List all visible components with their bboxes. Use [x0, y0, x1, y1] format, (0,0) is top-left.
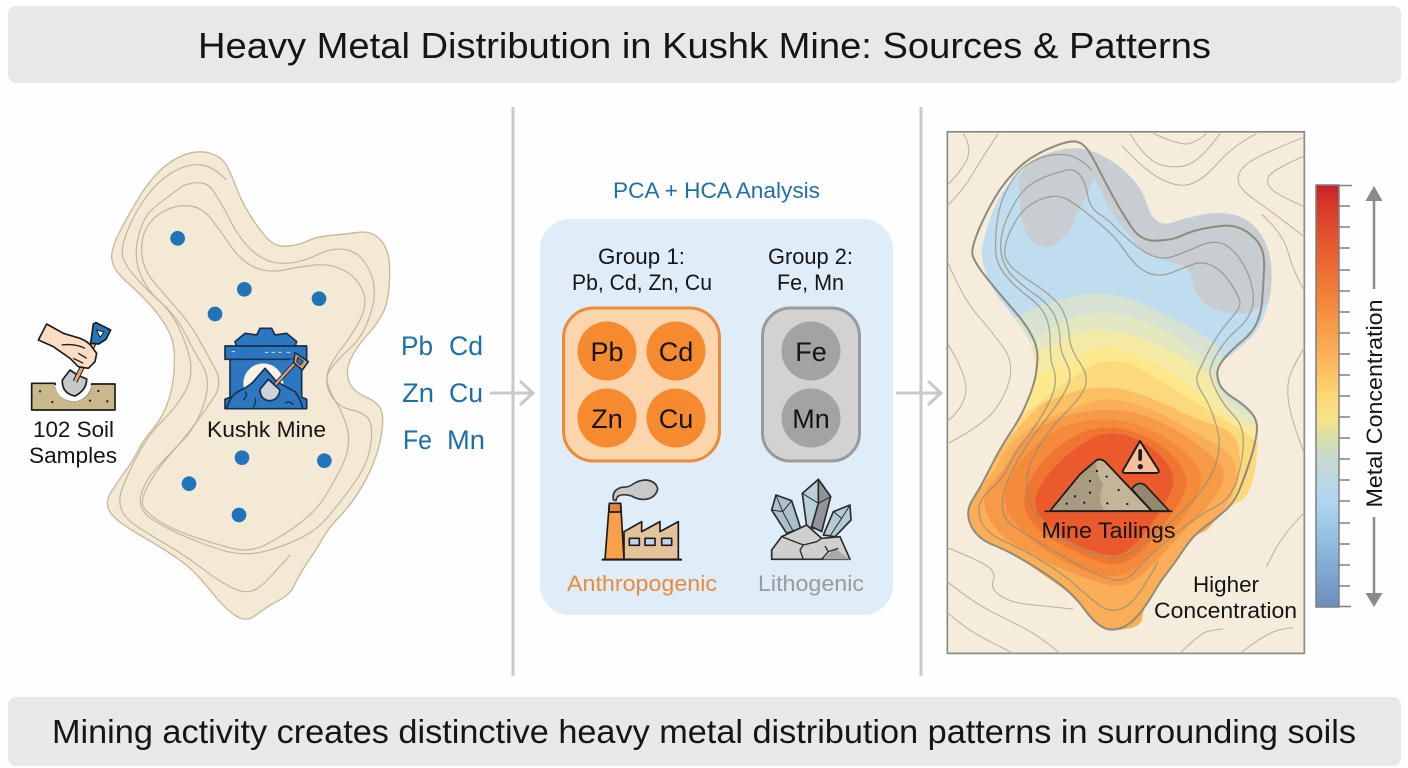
group 1 heading: Group 1:	[598, 244, 685, 269]
icon: warning triangle	[1123, 441, 1159, 473]
label: mine tailings: Mine Tailings	[1042, 518, 1176, 543]
color scale bar	[1316, 185, 1352, 607]
label: 102 soil samples: Samples	[29, 443, 117, 468]
label: 102 soil samples: 102 Soil	[33, 417, 114, 442]
icon: tailings pile	[1045, 460, 1172, 511]
metal symbols list: Cu	[449, 378, 483, 408]
icon: crystals on rock	[772, 479, 851, 559]
heading: PCA + HCA analysis: PCA + HCA Analysis	[613, 178, 820, 203]
group 2 element box: Fe	[795, 337, 827, 367]
group 1 heading: Pb, Cd, Zn, Cu	[572, 270, 712, 295]
arrow: metals to analysis	[490, 381, 533, 405]
axis arrow: metal concentration: Metal Concentration	[1362, 299, 1387, 508]
metal symbols list: Pb	[401, 331, 433, 361]
group 1 element box	[564, 308, 720, 461]
metal symbols list	[401, 331, 485, 455]
panel: analysis groups	[540, 219, 893, 615]
metal symbols list: Zn	[402, 378, 434, 408]
group 1 element box: Cu	[659, 404, 693, 434]
group 1 heading	[572, 244, 712, 295]
study area blob with contours	[107, 152, 390, 619]
panel: concentration heat map	[947, 132, 1305, 653]
icon: factory	[602, 480, 682, 560]
conclusion banner: Mining activity creates distinctive heavy metal distribution patterns in surrounding soils	[52, 713, 1356, 750]
icon: hand digging soil sample	[32, 323, 115, 410]
metal symbols list: Cd	[449, 331, 483, 361]
label: higher concentration: Higher	[1193, 572, 1259, 597]
metal symbols list: Mn	[447, 425, 485, 455]
heat layers	[969, 148, 1272, 630]
group 2 heading: Group 2:	[768, 244, 853, 269]
icon: mine	[225, 328, 308, 409]
group 2 heading	[768, 244, 853, 295]
group 1 element box: Pb	[590, 337, 624, 367]
label: higher concentration: Concentration	[1154, 598, 1297, 623]
label: 102 soil samples	[29, 417, 117, 468]
group 1 element box: Cd	[659, 337, 693, 367]
label: lithogenic: Lithogenic	[758, 571, 864, 596]
label: higher concentration	[1154, 572, 1297, 623]
panel: soil sampling map	[107, 152, 390, 619]
axis arrow: metal concentration	[1362, 186, 1387, 607]
group 2 heading: Fe, Mn	[777, 270, 844, 295]
group 2 element box: Mn	[792, 404, 830, 434]
arrow: analysis to map	[896, 381, 941, 405]
sample points	[170, 231, 332, 522]
title banner	[8, 6, 1401, 83]
group 2 element box	[762, 308, 860, 461]
group 1 element box: Zn	[591, 404, 623, 434]
conclusion banner	[8, 697, 1401, 766]
title banner: Heavy Metal Distribution in Kushk Mine: Sources & Patterns	[198, 25, 1211, 66]
label: anthropogenic: Anthropogenic	[567, 571, 717, 596]
metal symbols list: Fe	[403, 425, 432, 455]
topographic contours over heat	[979, 154, 1253, 610]
label: Kushk Mine: Kushk Mine	[207, 417, 326, 442]
